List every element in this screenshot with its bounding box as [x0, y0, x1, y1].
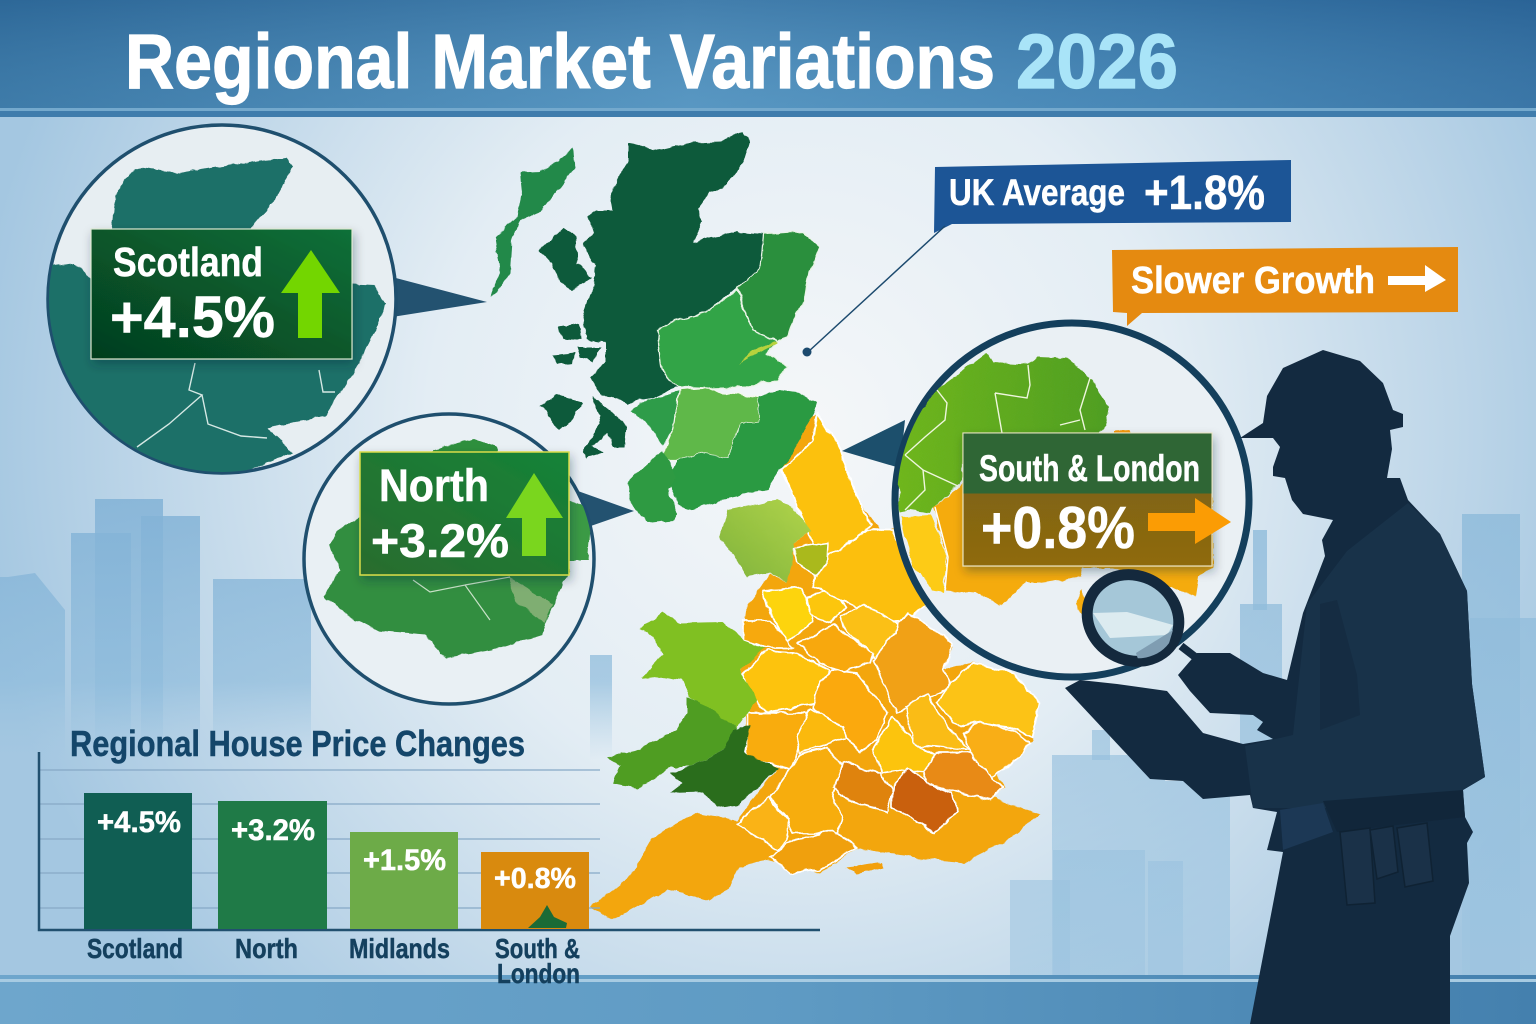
label: North: +3.2%: [371, 514, 509, 567]
map: South Wales: [670, 725, 778, 808]
bar: North: [218, 801, 327, 964]
bar: Midlands: +1.5%: [363, 844, 446, 877]
label: Scotland: Scotland: [113, 239, 263, 285]
leader line: [808, 226, 945, 352]
label: South & London: South & London: [979, 448, 1200, 489]
map: English regions: [737, 413, 1040, 873]
callout circle: Scotland: [35, 125, 396, 480]
bar: South & London: South &: [495, 933, 580, 964]
silhouette: tool pouches: [1340, 823, 1433, 905]
bar: Midlands: [349, 832, 458, 964]
map: Scottish Highlands: [583, 132, 765, 405]
icon: up arrow: [281, 250, 340, 338]
silhouette: surveyor: [1065, 350, 1485, 1024]
pointer: South & London: [842, 420, 905, 468]
silhouette: shirt: [1320, 600, 1360, 730]
title: Regional Market Variations: [125, 19, 995, 105]
bar: Scotland: Scotland: [87, 933, 183, 964]
title: 2026: [1016, 19, 1178, 105]
callout: UK Average: UK Average: [949, 172, 1125, 213]
label: South & London: [963, 433, 1231, 566]
callout: Slower Growth: [1112, 247, 1458, 326]
pointer: Scotland: [392, 277, 487, 317]
callout: UK Average: [802, 160, 1291, 356]
header band: [0, 0, 1536, 117]
map: Scottish islands: [540, 228, 627, 458]
map: Lancashire and Midlands patch: [718, 500, 812, 583]
bar: Midlands: Midlands: [349, 933, 450, 964]
icon: magnifying glass: [1082, 569, 1197, 667]
pointer: North: [575, 490, 634, 528]
map: Isle of Wight: [845, 862, 882, 875]
map: Central Scotland: [657, 290, 787, 388]
silhouette: belt: [1323, 790, 1465, 832]
background skyline left: [0, 499, 612, 760]
bar: North: North: [235, 933, 298, 964]
UK map: [490, 132, 1040, 920]
chart title: Regional House Price Changes: [70, 723, 525, 764]
bar: Scotland: [84, 793, 192, 964]
map: Cumbria: [628, 450, 677, 523]
map: North Wales: [640, 613, 765, 728]
label: Scotland: [91, 229, 352, 359]
callout circle: North: [304, 414, 594, 704]
silhouette: body: [1065, 350, 1485, 1024]
map: Firth strip: [738, 342, 778, 365]
icon: up arrow: [506, 473, 563, 556]
map: Borders: [630, 392, 680, 445]
callout: Slower Growth: Slower Growth: [1131, 260, 1375, 302]
icon: right arrow: [1388, 265, 1446, 292]
bar: South & London: +0.8%: [494, 863, 576, 895]
silhouette: lower shirt: [1280, 803, 1333, 850]
map: Outer Hebrides: [490, 148, 575, 295]
chart: Regional House Price Changes: [39, 723, 820, 989]
bar: Scotland: +4.5%: [97, 806, 181, 839]
bar: South & London: London: [497, 958, 580, 989]
map: Aberdeenshire: [737, 232, 820, 342]
label: South & London: +0.8%: [981, 495, 1135, 561]
label: Scotland: +4.5%: [110, 285, 275, 350]
silhouette: jacket: [1245, 503, 1485, 808]
bar: North: +3.2%: [231, 814, 315, 847]
map: England base: [590, 413, 1040, 920]
map: Mid Wales: [607, 697, 737, 788]
footer band: [0, 975, 1536, 1024]
label: North: North: [379, 460, 489, 511]
callout circle: South & London: [895, 323, 1249, 677]
label: North: [360, 452, 569, 575]
callout: UK Average: +1.8%: [1144, 167, 1265, 220]
map: Northumbria: [668, 390, 817, 510]
background skyline right: [1010, 514, 1536, 975]
bar: South & London: [481, 852, 589, 989]
icon: right arrow: [1148, 498, 1231, 544]
